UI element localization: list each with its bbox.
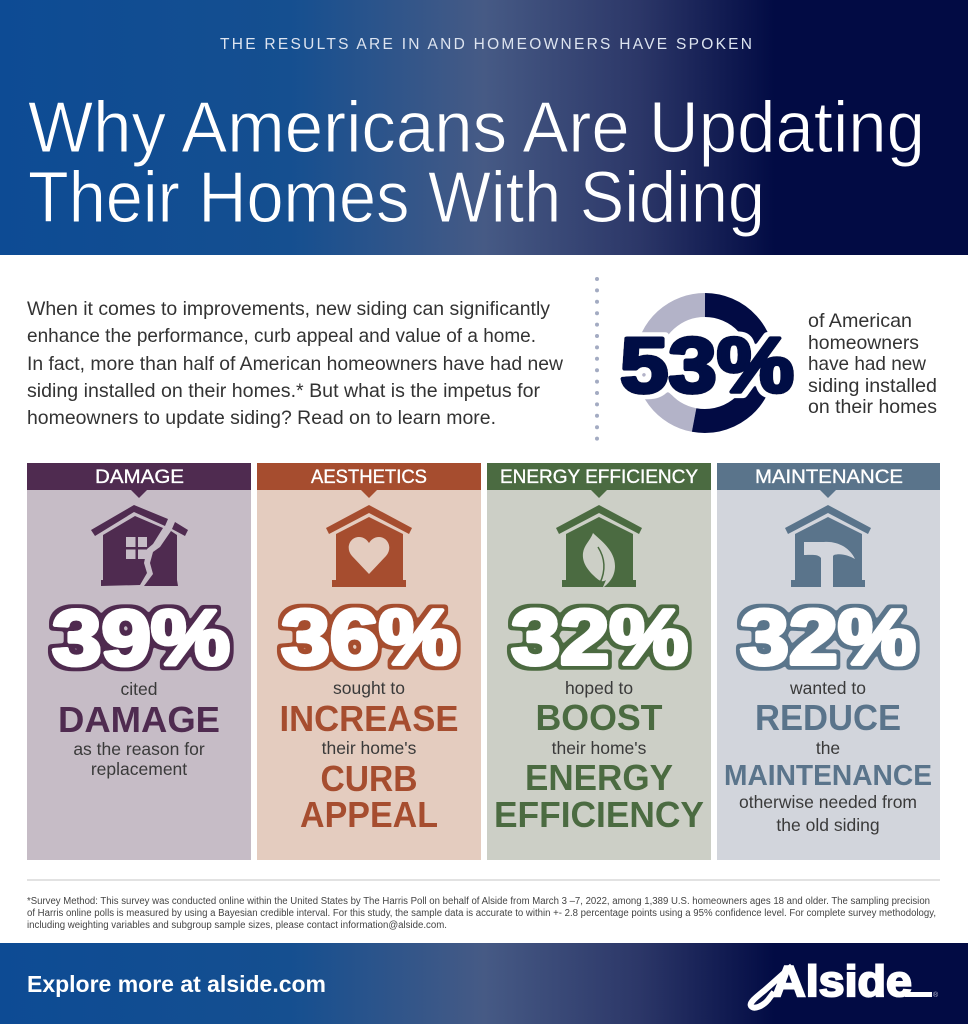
heading: maintenance: MAINTENANCE [755, 466, 903, 488]
description: maintenance: REDUCE [755, 697, 901, 738]
description: maintenance [724, 678, 932, 835]
heading: aesthetics: AESTHETICS [311, 466, 427, 488]
description: damage [58, 679, 220, 779]
description: energy efficiency: BOOST [536, 697, 662, 738]
stat: 39%: 39% [52, 594, 230, 682]
description: energy efficiency: ENERGY [525, 757, 673, 798]
logo: Alside: ® [933, 991, 939, 999]
intro paragraph: homeowners to update siding? Read on to learn more. [27, 408, 496, 429]
footer banner [0, 943, 968, 1024]
description: maintenance: the old siding [776, 815, 880, 835]
stat: 36%: 36% [281, 593, 457, 681]
intro paragraph: siding installed on their homes.* But what is the impetus for [27, 381, 541, 402]
description: energy efficiency [494, 678, 704, 835]
donut chart: 53% [620, 305, 794, 421]
title: Why Americans Are Updating [28, 88, 925, 168]
description: energy efficiency: EFFICIENCY [494, 794, 704, 835]
stat: 32%: 32% [740, 593, 916, 681]
description: damage: cited [121, 679, 157, 699]
logo: Alside [751, 957, 939, 1008]
53% caption [808, 310, 937, 418]
eyebrow text: THE RESULTS ARE IN AND HOMEOWNERS HAVE SPOKEN [220, 36, 752, 53]
description: energy efficiency: hoped to [565, 678, 633, 698]
description: damage: DAMAGE [58, 699, 220, 740]
53% caption: of American [808, 310, 912, 332]
description: maintenance: the [816, 738, 840, 758]
description: aesthetics: sought to [333, 678, 405, 698]
53% caption: siding installed [808, 375, 937, 397]
icon: cracked house [91, 505, 188, 586]
description: damage: replacement [91, 759, 187, 779]
description: aesthetics: their home's [322, 738, 417, 758]
description: energy efficiency: their home's [552, 738, 647, 758]
description: aesthetics: INCREASE [280, 698, 458, 739]
survey method footnote: *Survey Method: This survey was conducted online within the United States by The Harris Poll on behalf of Alside from March 3 –7, 2022, among 1,389 U.S. homeowners ages 18 and older. The sampling precision [27, 896, 930, 907]
intro paragraph: When it comes to improvements, new siding can significantly [27, 299, 551, 320]
intro paragraph: In fact, more than half of American homeowners have had new [27, 354, 563, 375]
heading: damage: DAMAGE [95, 466, 184, 488]
title [28, 88, 925, 238]
panel: damage [27, 463, 251, 860]
53% figure: 53% [620, 321, 794, 409]
intro paragraph: enhance the performance, curb appeal and value of a home. [27, 326, 536, 347]
description: aesthetics: APPEAL [300, 794, 438, 835]
survey method footnote: including weighting variables and subgroup sample sizes, please contact information@alside.com. [27, 920, 447, 931]
survey method footnote [27, 896, 936, 931]
icon: house with hammer [785, 505, 871, 587]
description: aesthetics [280, 678, 458, 835]
stat: 32%: 32% [511, 593, 688, 681]
heading: energy efficiency: ENERGY EFFICIENCY [500, 466, 698, 488]
53% caption: have had new [808, 353, 927, 375]
53% caption: on their homes [808, 396, 937, 418]
panel: aesthetics [257, 463, 481, 860]
53% caption: homeowners [808, 332, 919, 354]
description: damage: as the reason for [73, 739, 205, 759]
description: maintenance: MAINTENANCE [724, 760, 932, 792]
title: Their Homes With Siding [28, 158, 765, 238]
intro paragraph [27, 299, 563, 429]
description: maintenance: wanted to [789, 678, 866, 698]
header banner [0, 0, 968, 255]
description: aesthetics: CURB [320, 758, 418, 799]
icon: house with heart [326, 505, 412, 587]
icon: house with leaf [556, 505, 642, 587]
panel: energy efficiency [487, 463, 711, 860]
survey method footnote: of Harris online polls is measured by using a Bayesian credible interval. For this study, the sample data is accurate to within +- 2.8 percentage points using a 95% confidence level. For complete survey methodology, [27, 908, 936, 919]
call to action: Explore more at alside.com [27, 971, 326, 997]
panel: maintenance [717, 463, 940, 860]
description: maintenance: otherwise needed from [739, 792, 917, 812]
logo: Alside: Alside [772, 957, 912, 1006]
